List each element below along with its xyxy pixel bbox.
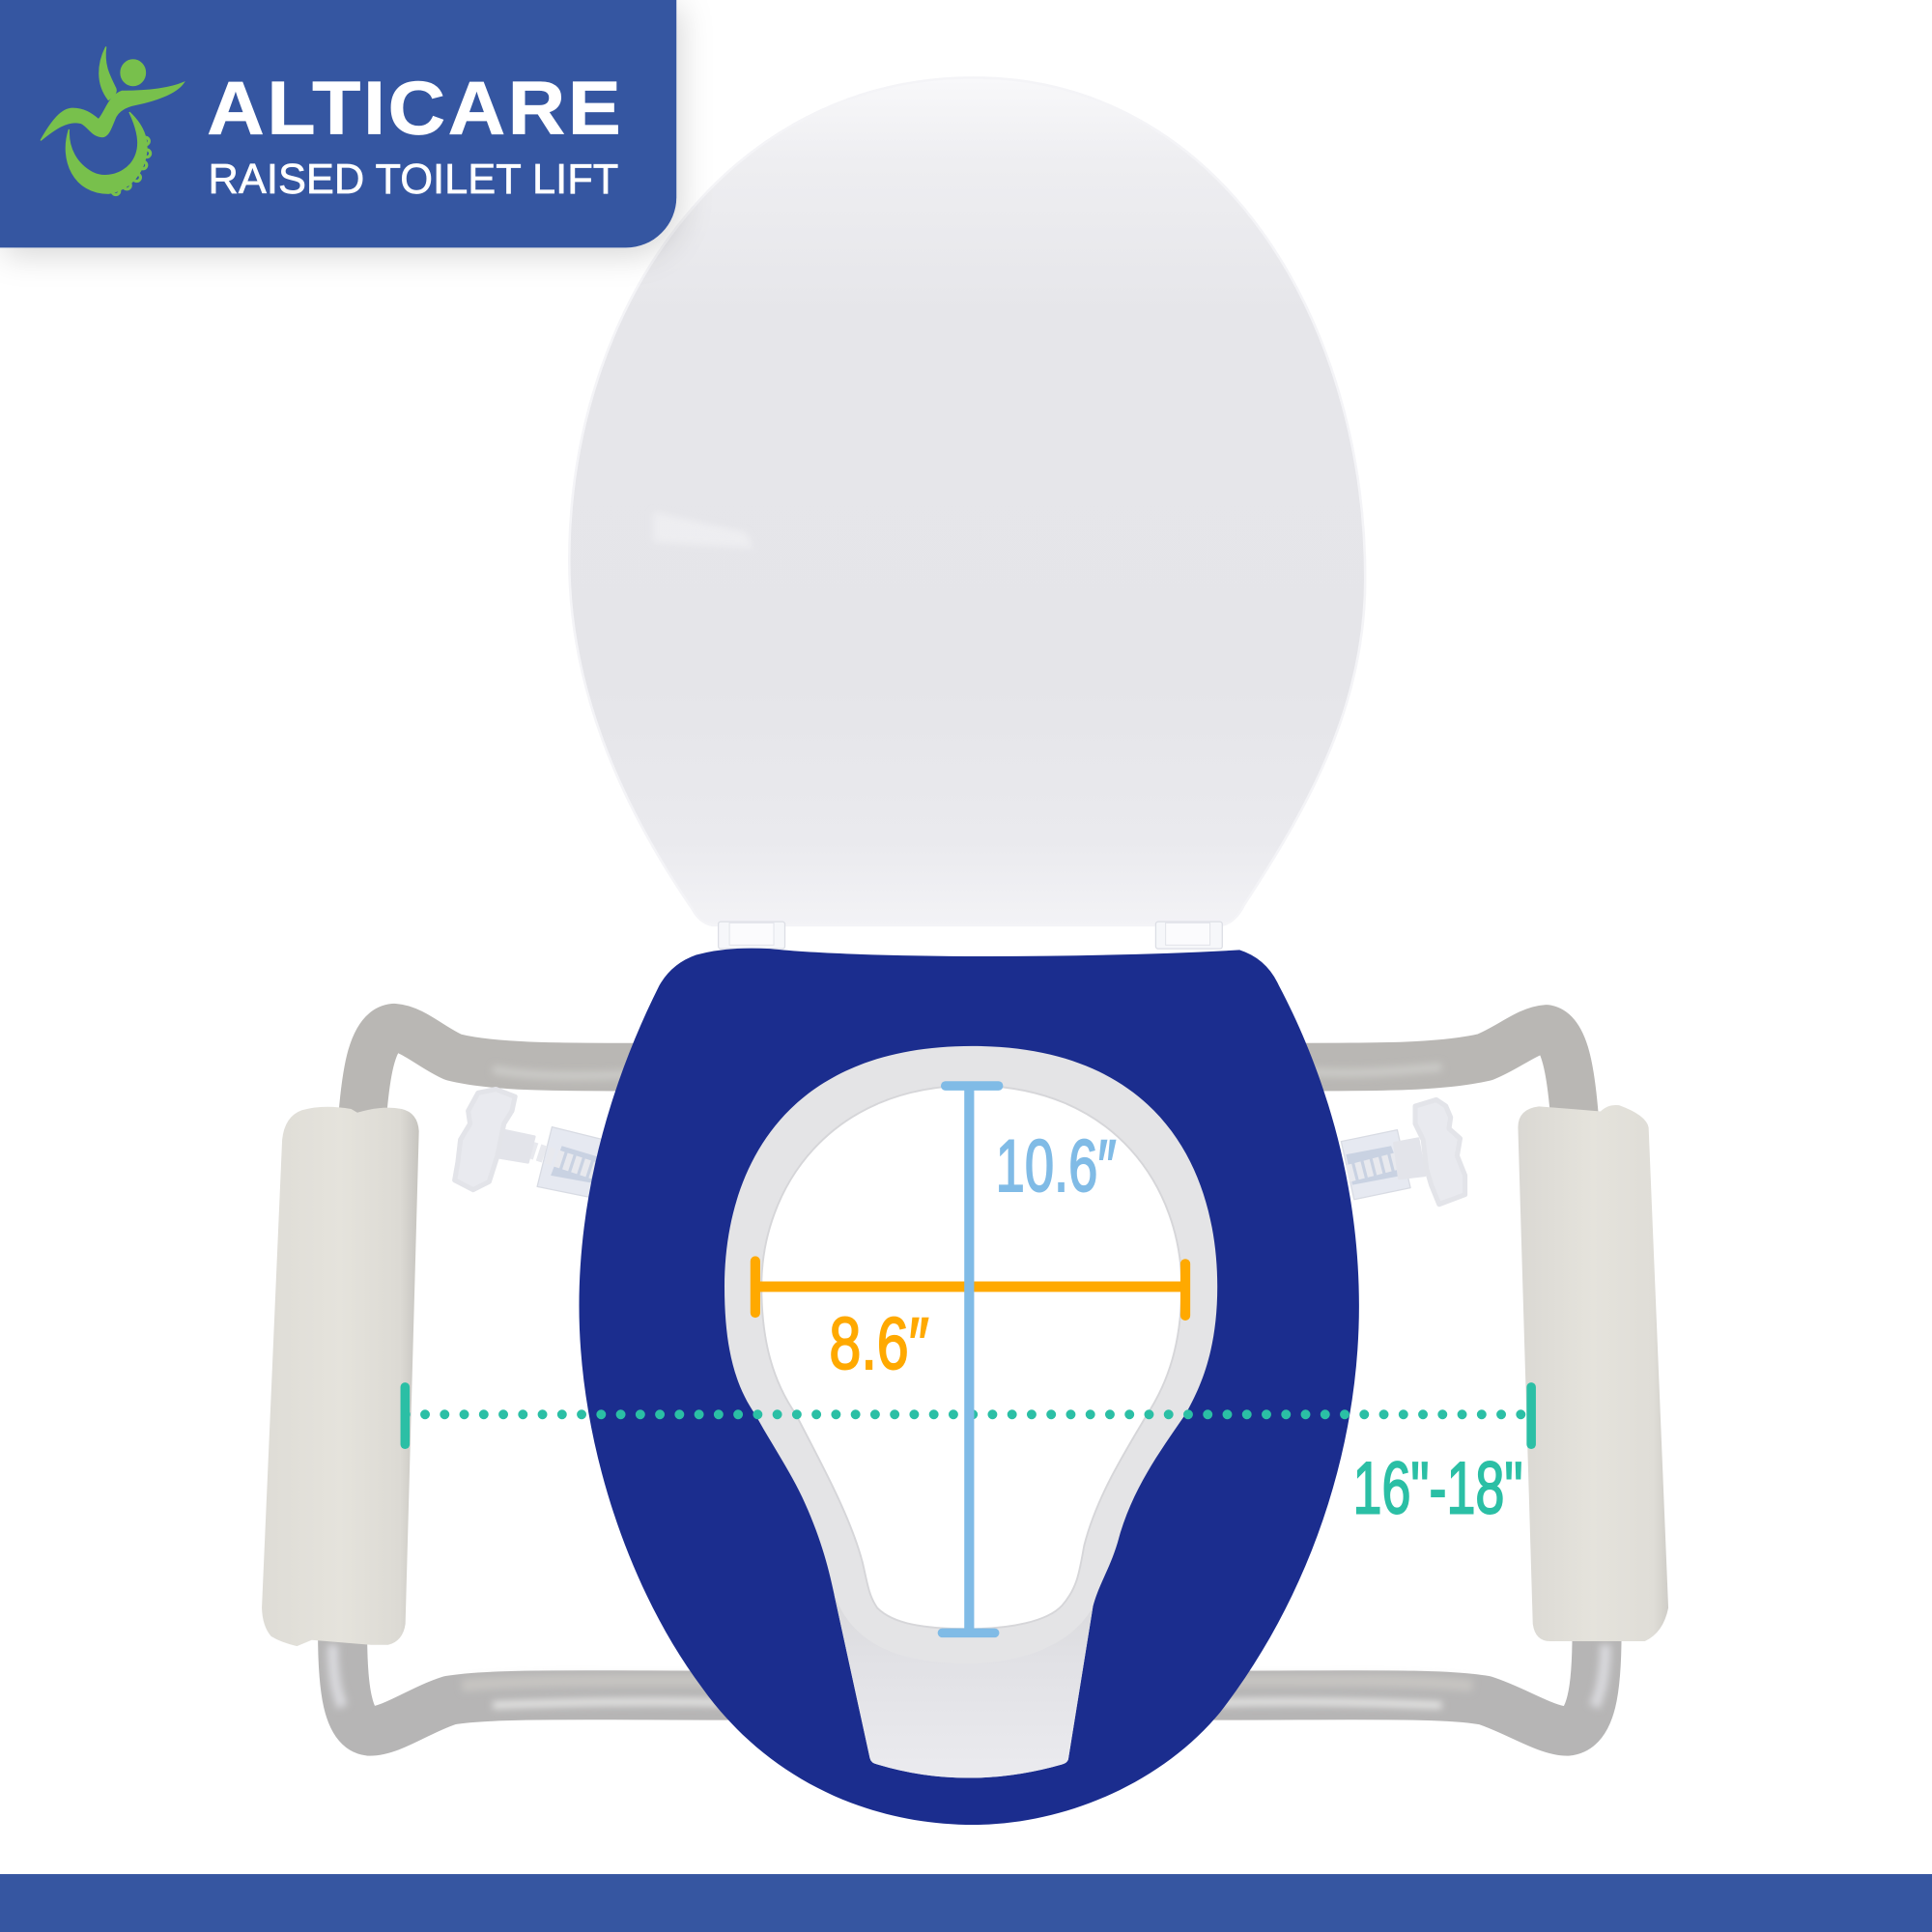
footer band (0, 1874, 1932, 1932)
dimension: width between arms 16-18: 16"-18" (1353, 1447, 1523, 1529)
armrest frame: top right tube (1303, 1029, 1575, 1119)
armrest frame: bottom right tube (1213, 1633, 1605, 1731)
dimension: seat opening length 10.6: 10.6″ (996, 1125, 1117, 1208)
lid hinge: left (719, 922, 784, 949)
clamp knob: right (1341, 1099, 1465, 1205)
dimension: seat opening width 8.6: 8.6″ (829, 1303, 929, 1385)
icon: alticare logo (41, 46, 184, 195)
arm pad: left (262, 1107, 419, 1646)
arm pad: right (1518, 1105, 1668, 1641)
header banner (0, 0, 676, 247)
clamp knob: left (455, 1090, 604, 1198)
dimension: seat opening width 8.6 (751, 1256, 1190, 1385)
lid hinge: right (1155, 922, 1222, 949)
dimension: width between arms 16-18 (401, 1382, 1536, 1529)
brand name: ALTICARE (207, 67, 623, 150)
toilet lid (569, 77, 1365, 925)
seat opening: white ring (724, 1046, 1217, 1778)
blue seat cushion (579, 949, 1359, 1825)
product name: RAISED TOILET LIFT (209, 156, 618, 203)
armrest frame: top left tube (362, 1028, 635, 1119)
dimension: seat opening length 10.6 (938, 1081, 1117, 1637)
armrest frame: bottom left tube (332, 1633, 733, 1731)
